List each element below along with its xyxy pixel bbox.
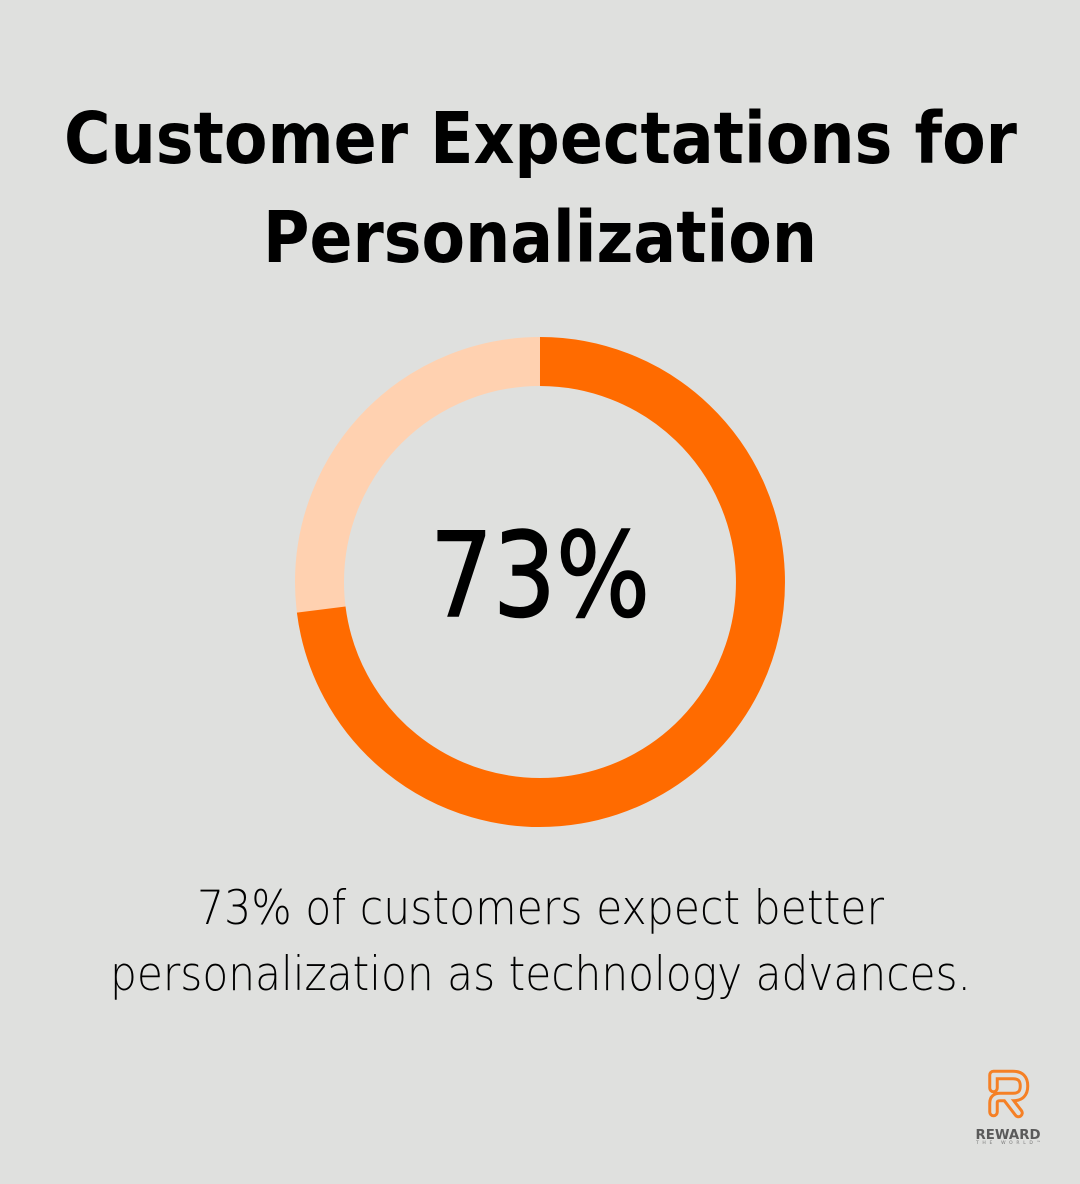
description text: 73% of customers expect better	[197, 881, 885, 936]
title: Personalization	[263, 196, 817, 279]
donut chart: 73 percent	[320, 362, 760, 802]
logo icon: R	[994, 1075, 1024, 1113]
logo: Reward the World	[975, 1075, 1041, 1146]
logo tagline: THE WORLD™	[975, 1140, 1041, 1146]
title	[64, 97, 1017, 279]
description text: personalization as technology advances.	[110, 947, 971, 1002]
description text	[110, 881, 971, 1002]
logo wordmark: REWARD	[976, 1128, 1041, 1143]
donut centre value: 73%	[430, 507, 650, 644]
